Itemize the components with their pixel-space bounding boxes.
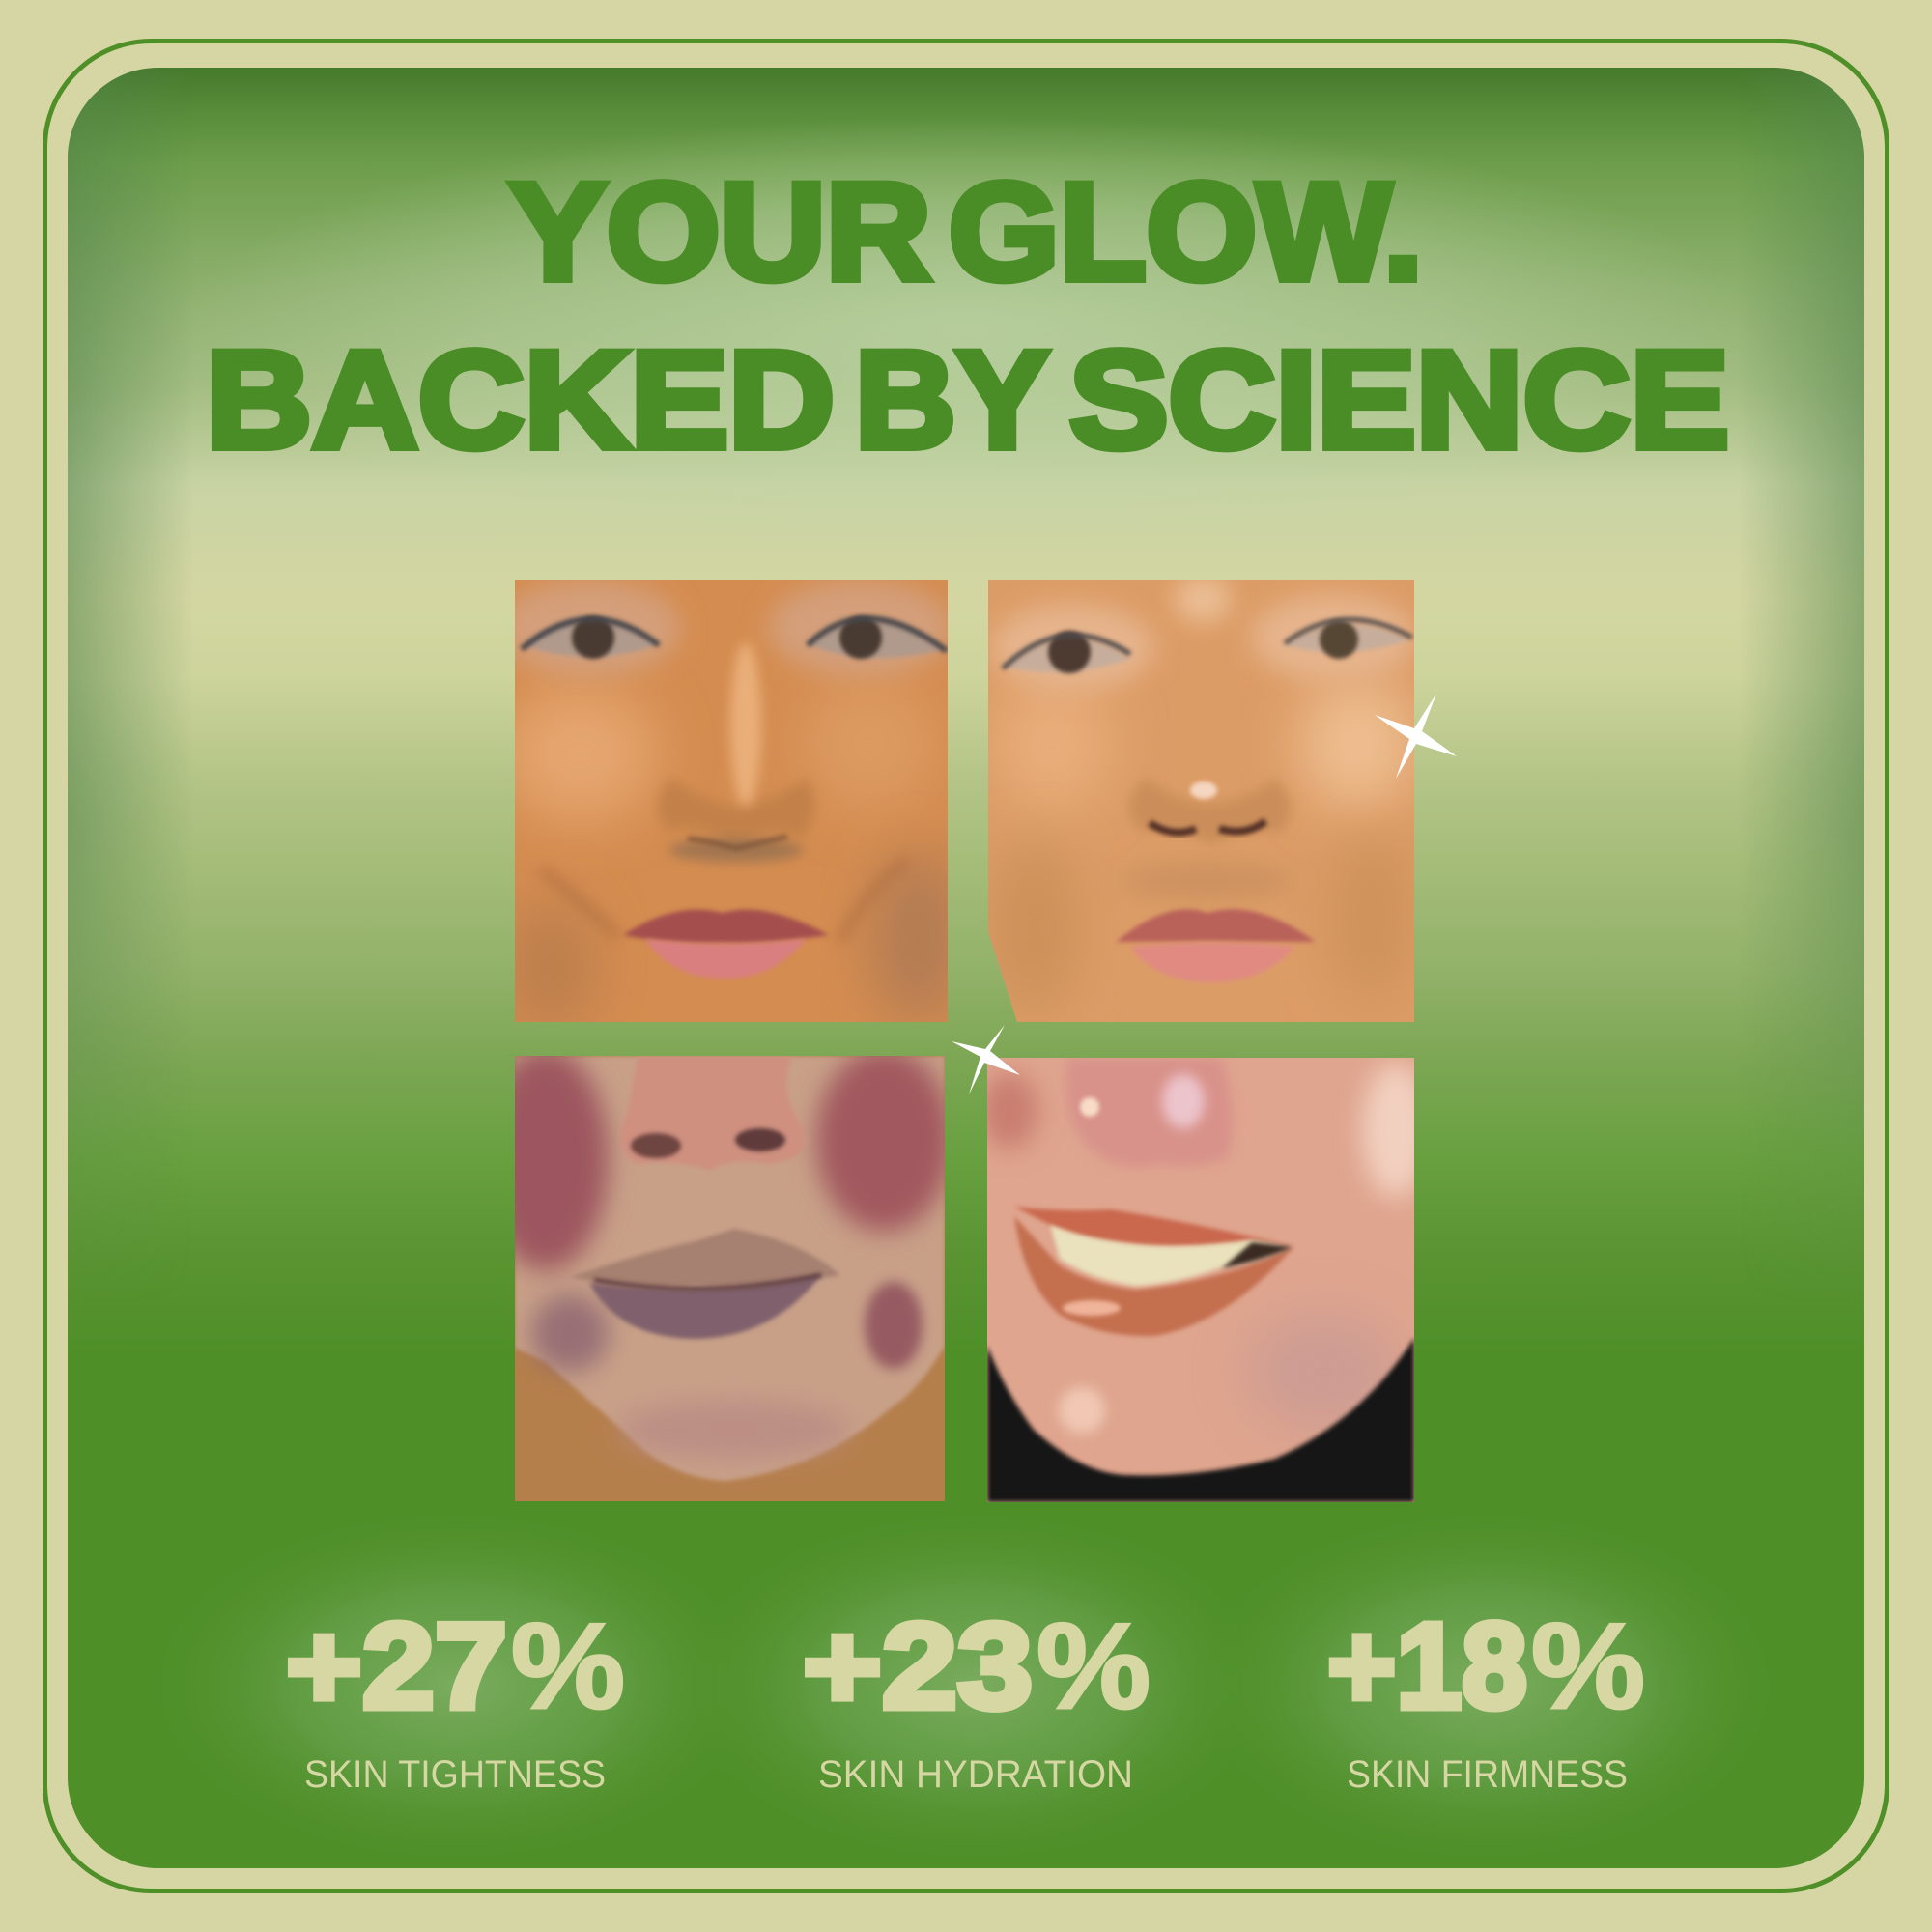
photo: after, lower face <box>980 1058 1430 1502</box>
stat: skin tightness: +27 <box>286 1598 507 1734</box>
stat glows <box>224 1552 1709 1820</box>
photo: before, upper face <box>497 580 966 1034</box>
stat: skin tightness <box>286 1598 625 1796</box>
stat: skin firmness: +18 <box>1327 1598 1527 1734</box>
photo: after, upper face <box>988 576 1415 1022</box>
title <box>206 156 1729 477</box>
title line 2: BACKED <box>206 324 835 477</box>
title line 1 <box>509 156 1423 309</box>
stat: skin tightness: SKIN TIGHTNESS <box>304 1753 606 1796</box>
stat: skin hydration <box>803 1598 1151 1796</box>
stat: skin firmness: SKIN FIRMNESS <box>1347 1753 1628 1796</box>
photo: before, lower face <box>483 1048 952 1501</box>
title line 2: BY <box>855 324 1049 477</box>
stat: skin hydration: % <box>1037 1598 1151 1734</box>
stat: skin firmness <box>1327 1598 1645 1796</box>
title line 1: GLOW. <box>949 156 1423 309</box>
stat: skin hydration: +23 <box>803 1598 1033 1734</box>
title line 1: YOUR <box>509 156 931 309</box>
title line 2 <box>206 324 1729 477</box>
stat: skin hydration: SKIN HYDRATION <box>818 1753 1133 1796</box>
sparkle: right cheek <box>1375 694 1457 779</box>
sparkle: centre <box>952 1025 1020 1094</box>
stat: skin tightness: % <box>511 1598 625 1734</box>
title line 2: SCIENCE <box>1069 324 1729 477</box>
stat: skin firmness: % <box>1531 1598 1645 1734</box>
